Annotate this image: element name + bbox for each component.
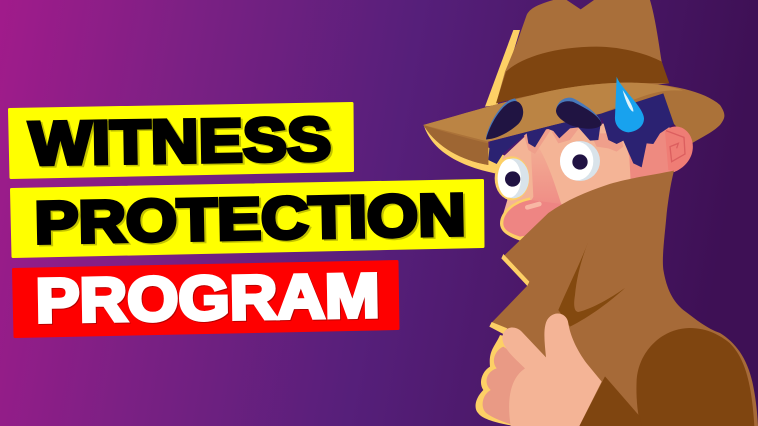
character: witness in hat and trench coat — [423, 0, 758, 426]
sleeve — [636, 328, 754, 426]
nose — [510, 133, 562, 220]
hat brim — [423, 83, 724, 165]
banner: PROGRAM: PROGRAM — [36, 263, 381, 337]
fingers — [483, 347, 533, 426]
banner: WITNESS: WITNESS — [29, 105, 332, 177]
banner: PROGRAM: PROGRAM — [35, 262, 380, 336]
collar fold — [558, 242, 625, 327]
hair — [488, 93, 674, 167]
cheek shading — [623, 127, 675, 182]
right eye — [560, 141, 600, 181]
cuff — [579, 376, 642, 426]
hair fringe shadow — [523, 127, 623, 154]
fingers outline — [476, 335, 533, 426]
banner: WITNESS: WITNESS — [31, 106, 334, 179]
hat crown — [497, 0, 668, 102]
banner: PROTECTION: PROTECTION — [36, 183, 468, 257]
yellow hat strip — [485, 30, 520, 107]
hat band — [496, 47, 669, 103]
sweat drop — [615, 77, 644, 132]
coat — [492, 171, 758, 426]
yellow under-brim edge — [424, 126, 507, 173]
yellow coat trim low — [489, 322, 507, 334]
banner: PROTECTION: PROTECTION — [34, 182, 466, 256]
lips outline — [500, 197, 533, 241]
lips — [503, 200, 562, 237]
brim highlight — [423, 83, 683, 142]
right eyebrow — [556, 98, 602, 125]
face — [498, 117, 675, 227]
yellow collar trim — [501, 254, 529, 286]
ear — [665, 126, 693, 172]
left eye — [495, 156, 529, 200]
left eyebrow — [486, 98, 523, 140]
brim shadow — [423, 125, 488, 165]
hand — [502, 314, 602, 426]
